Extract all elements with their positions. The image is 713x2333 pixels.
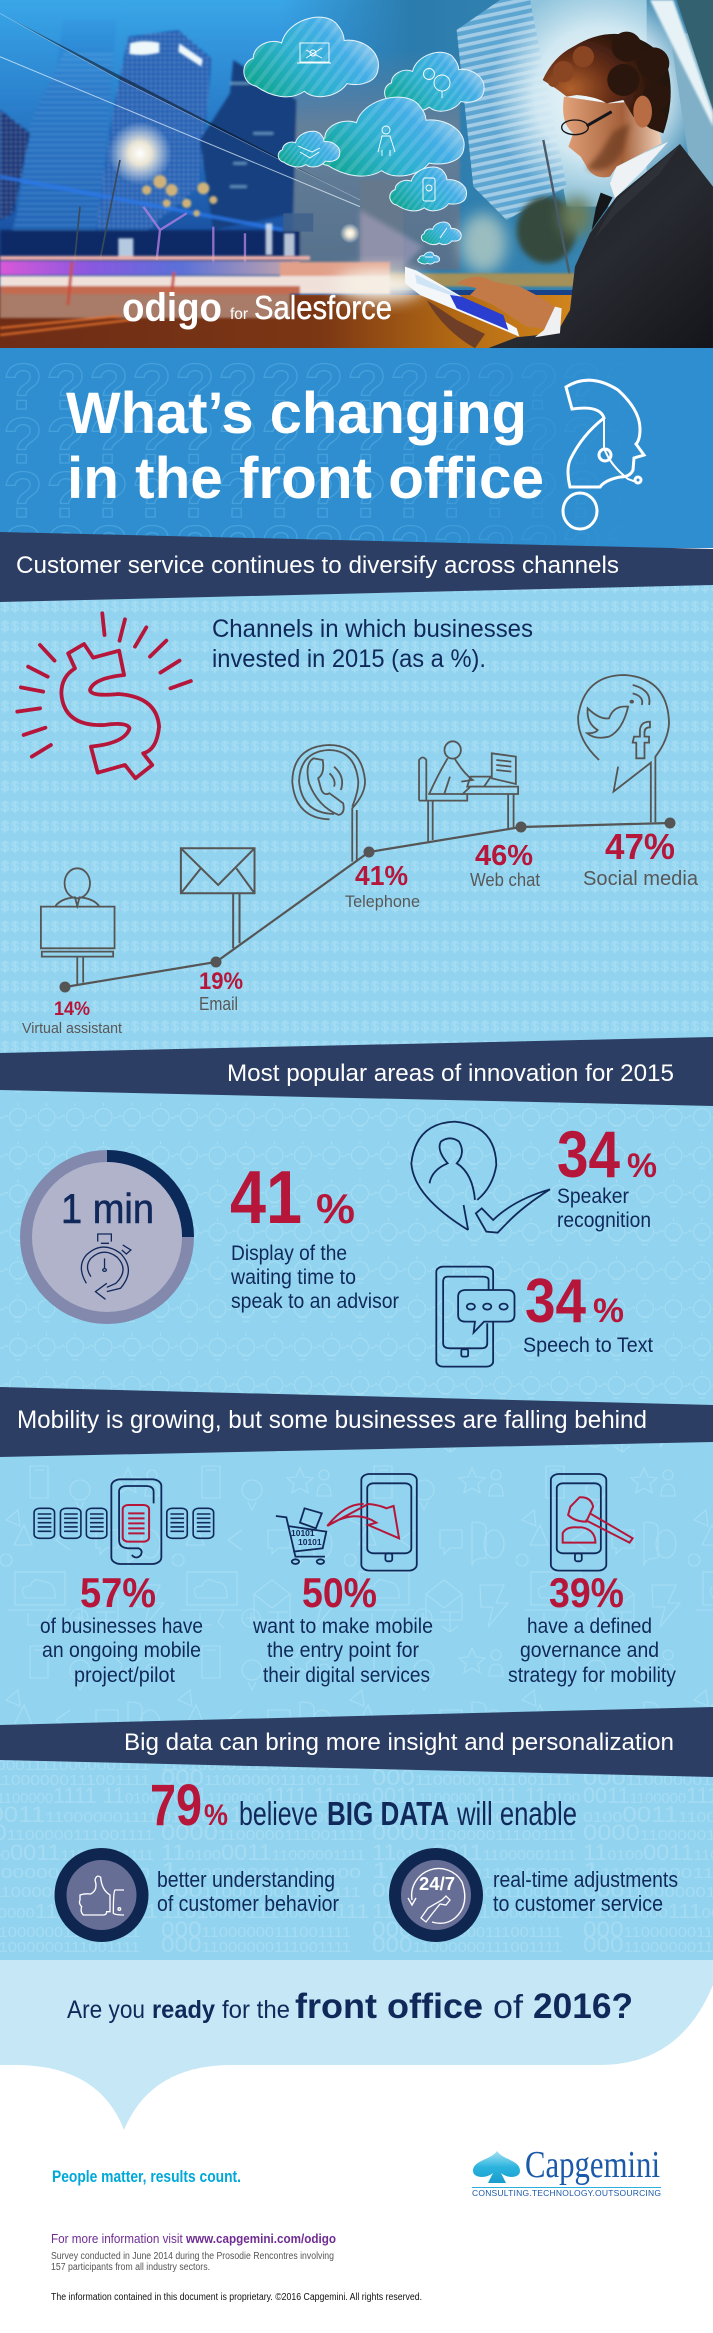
stat: 34% speaker recognition: [557, 1117, 657, 1232]
data label: 47% social media: [583, 826, 699, 890]
data label: 14% virtual assistant: Virtual assistant: [22, 1020, 123, 1037]
cuff: [535, 307, 562, 337]
icon: virtual assistant: [41, 868, 115, 984]
stat: 41% waiting time: waiting time to: [230, 1266, 356, 1289]
stat: 79% believe big data: [150, 1773, 577, 1838]
hand: [457, 277, 557, 330]
panel: innovation background: [0, 1080, 713, 1410]
icon: phone with gavel: [551, 1474, 633, 1571]
stat: 57%: project/pilot: [74, 1664, 175, 1687]
icon: phone with documents: [34, 1479, 214, 1564]
stat: 41% waiting time: speak to an advisor: [231, 1290, 399, 1313]
logo: Capgemini: CONSULTING.TECHNOLOGY.OUTSOURCING: [472, 2188, 661, 2198]
stat: 79% believe big data: BIG DATA: [327, 1795, 449, 1832]
panel: channels background: [0, 580, 713, 1060]
stat: 50%: the entry point for: [267, 1639, 419, 1662]
footer: more information: [51, 2231, 422, 2303]
icon: cart into phone: 10101: [298, 1537, 322, 1547]
icon: cart into phone: 10101: [291, 1528, 315, 1538]
icon: phone with speech bubble: [436, 1267, 514, 1367]
stat: 39%: have a defined: [527, 1615, 652, 1638]
stat: 41% waiting time: Display of the: [231, 1242, 347, 1265]
stat: 34% speech to text: [523, 1267, 653, 1357]
lapel: [593, 145, 680, 240]
city towers left: [0, 13, 460, 307]
text: real-time adjustments: real-time adjustments: [493, 1867, 678, 1892]
spade: [473, 2151, 520, 2183]
neck and face: [563, 97, 662, 177]
icon: web chat desk: [419, 741, 518, 842]
dusk sky on right: [280, 0, 713, 290]
stat: 50%: their digital services: [263, 1664, 430, 1687]
road: [0, 295, 713, 348]
headline: in the front office: [67, 446, 544, 511]
tagline: People matter, results count.: [52, 2167, 241, 2186]
stat: 41% waiting time: 41: [230, 1155, 302, 1239]
speech bubble: closing question: [0, 1960, 713, 2130]
hair: [543, 32, 671, 133]
stat: 39%: strategy for mobility: [508, 1664, 676, 1687]
title background: [0, 348, 713, 548]
icon: red dollar sign: [17, 613, 191, 778]
data label: 46% web chat: Web chat: [470, 870, 540, 890]
cloud icons: [297, 43, 450, 257]
stat: 39%: [508, 1569, 676, 1687]
text: real-time adjustments: [493, 1867, 678, 1916]
stat: 41% waiting time: [230, 1155, 399, 1313]
line chart: channel investment: [22, 675, 699, 1037]
stat: 34% speech to text: 34: [525, 1267, 586, 1336]
stat: 34% speaker recognition: Speaker: [557, 1185, 629, 1208]
stat: 79% believe big data: 79: [150, 1773, 202, 1838]
banner: big data: [0, 1707, 713, 1777]
data label: 46% web chat: 46%: [475, 840, 533, 872]
data label: 47% social media: 47%: [605, 826, 675, 867]
chart line and points: [60, 818, 676, 992]
odigo for Salesforce logo: odigo: [122, 286, 222, 330]
man with tablet: [405, 32, 713, 350]
tie: [592, 193, 613, 230]
speech bubble: closing question: 2016?: [533, 1987, 633, 2026]
stat: 79% believe big data: believe: [239, 1795, 318, 1832]
clouds: [244, 17, 484, 264]
banner: innovation: [0, 1037, 713, 1106]
speech bubble: closing question: front office: [295, 1987, 483, 2026]
banner: mobility: Mobility is growing, but some businesses are falling behind: [17, 1406, 647, 1434]
text: real-time adjustments: to customer service: [493, 1891, 663, 1916]
icon: telephone: [292, 745, 365, 862]
glasses: [562, 112, 612, 135]
speech bubble: closing question: Are you: [67, 1996, 145, 2024]
stat: 34% speech to text: Speech to Text: [523, 1334, 653, 1357]
beard shading: [587, 123, 630, 170]
stat: 57%: of businesses have: [40, 1615, 203, 1638]
white glow at tablet: [335, 269, 425, 301]
data label: 41% telephone: Telephone: [345, 892, 420, 911]
data label: 19% email: [199, 968, 243, 1014]
banner: customer service: [0, 532, 713, 602]
data label: 47% social media: Social media: [583, 868, 699, 890]
icon: stopwatch: [81, 1234, 131, 1299]
tablet: [405, 267, 519, 337]
headline: [66, 381, 544, 511]
text: better understanding: of customer behavior: [157, 1891, 339, 1916]
icon: speaker recognition pin: [411, 1122, 550, 1233]
stat: 57%: an ongoing mobile: [42, 1639, 201, 1662]
timer dial: 1 min: 1 min: [61, 1185, 154, 1232]
hero photo banner: [0, 0, 713, 350]
speech bubble: closing question: for the: [222, 1996, 290, 2024]
stat: 34% speech to text: %: [593, 1292, 624, 1330]
stat: 50%: want to make mobile: [252, 1615, 433, 1638]
footer: more information: 157 participants from all industry sectors.: [51, 2262, 210, 2273]
banner: big data: Big data can bring more insight and personalization: [124, 1729, 674, 1756]
footer: more information: For more information visit www.capgemini.com/odigo: [51, 2231, 336, 2246]
right city and glow: [360, 0, 713, 287]
odigo for Salesforce logo: for: [230, 306, 249, 323]
stat: 79% believe big data: will enable: [456, 1795, 577, 1832]
headline: What’s changing: [66, 381, 527, 446]
icon: cart into phone: [276, 1474, 417, 1571]
text: better understanding: better understanding: [157, 1867, 335, 1892]
footer: more information: The information contained in this document is proprietary. ©2016 Capgemini. All rights reserved.: [51, 2292, 422, 2303]
timer dial: 1 min: [20, 1150, 194, 1324]
stat: 34% speaker recognition: %: [627, 1147, 657, 1185]
banner: customer service: Customer service continues to diversify across channels: [16, 552, 619, 579]
stat: 41% waiting time: %: [316, 1185, 355, 1232]
stat: 50%: 50%: [302, 1569, 377, 1616]
stat: 50%: [252, 1569, 433, 1687]
icon: 24/7 service: [389, 1848, 483, 1942]
panel: big data background: [0, 1750, 713, 1960]
data label: 41% telephone: 41%: [355, 860, 408, 891]
data label: 19% email: Email: [199, 994, 238, 1014]
stat: 57%: 57%: [80, 1569, 156, 1616]
data label: 14% virtual assistant: 14%: [54, 999, 90, 1020]
panel: mobility background: [0, 1430, 713, 1725]
data label: 41% telephone: [345, 860, 420, 911]
speech bubble: closing question: of: [493, 1988, 524, 2025]
text: channels intro: invested in 2015 (as a %).: [212, 645, 486, 673]
stat: 34% speaker recognition: 34: [557, 1117, 620, 1191]
logo: Capgemini: [472, 2144, 661, 2198]
title section: [0, 348, 713, 548]
banner: mobility: [0, 1387, 713, 1457]
text: better understanding: [157, 1867, 339, 1916]
icon: thumbs up: [54, 1848, 148, 1942]
data label: 19% email: 19%: [199, 968, 243, 995]
icon: question-mark head with headset: [563, 380, 644, 529]
odigo for Salesforce logo: Salesforce: [254, 289, 392, 326]
ear: [633, 96, 652, 128]
light trails: [0, 256, 390, 335]
speech bubble: closing question: ready: [152, 1996, 215, 2024]
icon: 24/7 service: 24/7: [419, 1874, 455, 1894]
icon: email: [181, 848, 255, 948]
jacket: [483, 144, 713, 350]
footer: more information: Survey conducted in June 2014 during the Prosodie Rencontres involving: [51, 2251, 334, 2262]
stat: 79% believe big data: %: [204, 1799, 228, 1832]
data label: 14% virtual assistant: [22, 999, 123, 1037]
sky background: [0, 0, 713, 300]
stat: 57%: [40, 1569, 203, 1687]
odigo for Salesforce logo: [122, 286, 392, 330]
text: channels intro: [212, 615, 533, 673]
stat: 39%: 39%: [549, 1569, 624, 1616]
icon: social media: [578, 675, 669, 822]
data label: 46% web chat: [470, 840, 540, 890]
logo: Capgemini: Capgemini: [525, 2144, 660, 2186]
text: channels intro: Channels in which businesses: [212, 615, 533, 643]
stat: 34% speaker recognition: recognition: [557, 1209, 651, 1232]
stat: 39%: governance and: [520, 1639, 659, 1662]
banner: innovation: Most popular areas of innovation for 2015: [227, 1060, 674, 1087]
shirt collar: [610, 142, 668, 198]
